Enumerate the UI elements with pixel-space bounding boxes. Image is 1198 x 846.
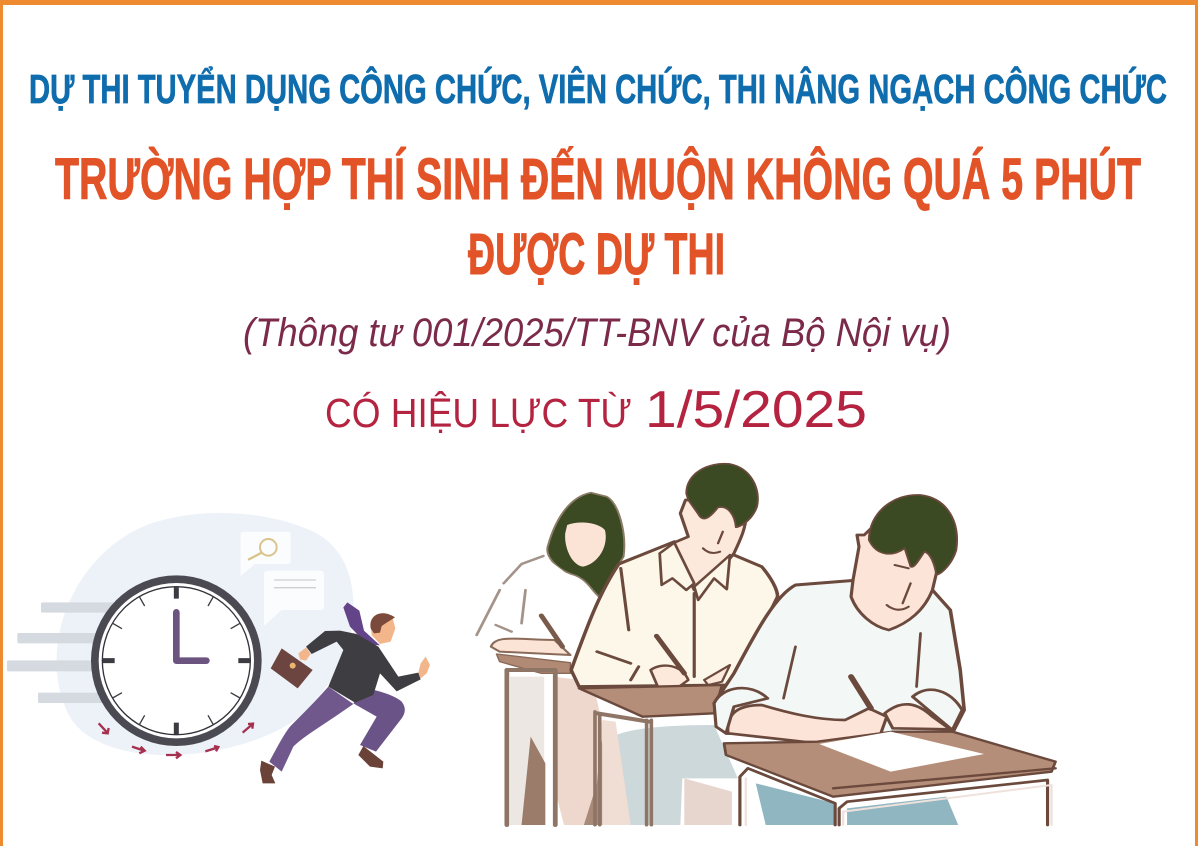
boy two jeans [613, 725, 738, 825]
illustration: students taking exam [477, 464, 1056, 825]
desk one legs and skirt [553, 677, 633, 825]
speed lines [7, 602, 118, 703]
running man [260, 602, 430, 783]
back trouser leg [353, 688, 405, 752]
student three: boy in front [714, 495, 1056, 825]
clock hands [176, 612, 206, 661]
boy two hands and pencil [651, 666, 688, 690]
desk three [724, 732, 1056, 797]
trousers [756, 783, 958, 825]
hands [418, 657, 430, 678]
student three arms [728, 705, 887, 745]
front trouser leg [269, 687, 353, 772]
effective date: CÓ HIỆU LỰC TỪ [325, 390, 632, 436]
student one: girl [477, 493, 633, 825]
tie [343, 602, 380, 645]
desk three frame [740, 768, 1048, 825]
head [371, 618, 395, 644]
effective date [325, 381, 867, 439]
jacket and arms [306, 631, 421, 703]
desk two and legs [579, 685, 722, 717]
briefcase [271, 648, 313, 688]
speech bubble: magnifier [241, 532, 291, 576]
student two: boy in cream shirt [571, 464, 778, 825]
background blob [57, 513, 353, 755]
rotation arrows [99, 723, 253, 758]
clock [91, 575, 262, 746]
student three pencil [851, 677, 871, 708]
legal reference: (Thông tư 001/2025/TT-BNV của Bộ Nội vụ) [243, 311, 951, 355]
heading: main line two: ĐƯỢC DỰ THI [468, 222, 725, 287]
shoes [358, 746, 383, 768]
speech bubble: text [264, 571, 324, 626]
exam paper [819, 732, 984, 772]
effective date: 1/5/2025 [645, 381, 867, 439]
illustration: clock and running man [7, 513, 430, 783]
